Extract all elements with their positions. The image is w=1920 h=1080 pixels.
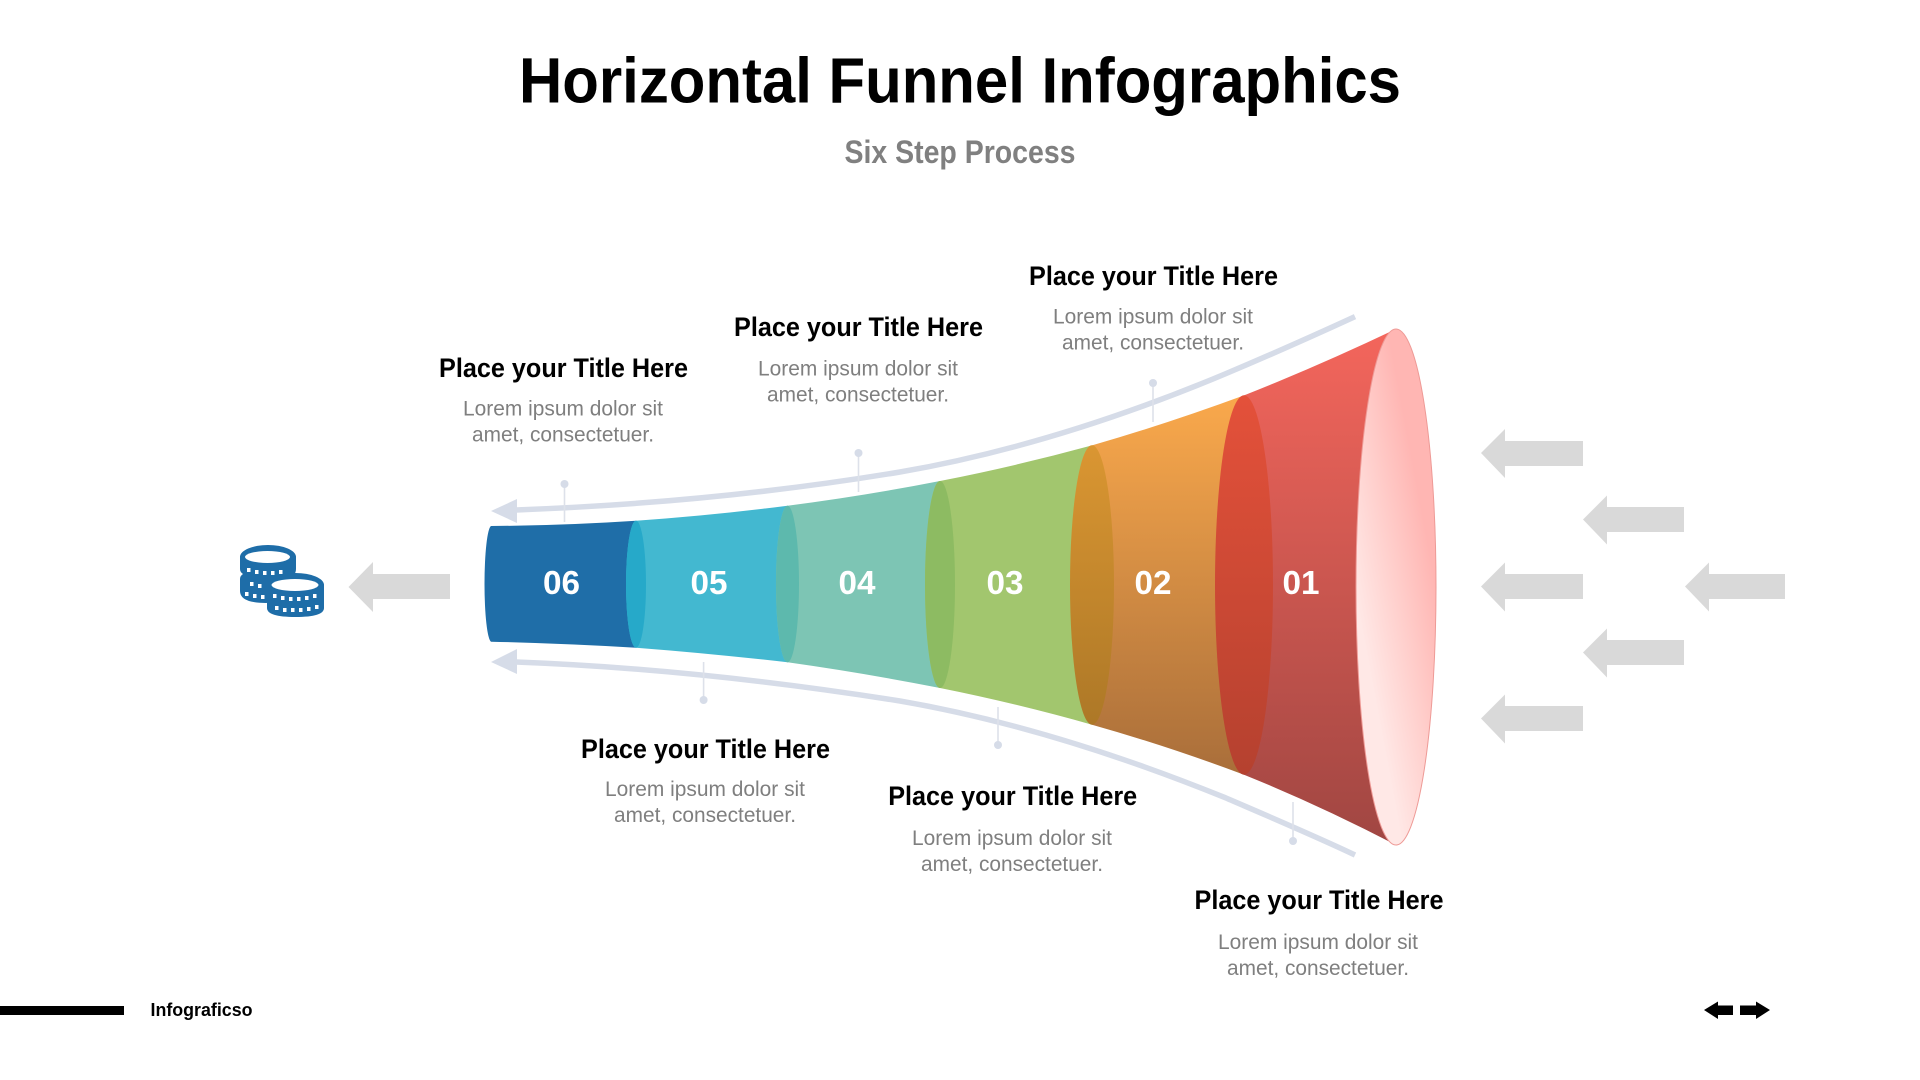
joint 06-05 xyxy=(626,521,646,648)
callout heading: Place your Title Here xyxy=(888,781,1137,811)
callout heading: Place your Title Here xyxy=(1029,261,1278,291)
segment 05 xyxy=(626,506,799,662)
connector 04 xyxy=(854,449,862,492)
callout body xyxy=(1053,306,1253,354)
funnel mouth xyxy=(1356,329,1436,845)
callout: step 02 xyxy=(1029,261,1278,354)
joint 02-01 xyxy=(1215,395,1273,775)
connector 03 xyxy=(994,707,1002,749)
footer arrows xyxy=(1704,1002,1770,1019)
segment 06 xyxy=(485,521,646,648)
footer brand: Infograficso xyxy=(150,1000,252,1020)
joint 05-04 xyxy=(776,506,799,662)
segment 02 xyxy=(1072,395,1271,775)
segment 01 xyxy=(1217,329,1436,845)
callout body xyxy=(1218,931,1418,980)
callout heading: Place your Title Here xyxy=(439,353,688,383)
callout heading: Place your Title Here xyxy=(1194,885,1444,915)
callout body: amet, consectetuer. xyxy=(614,804,796,827)
segment 03 xyxy=(925,445,1112,725)
callout body: Lorem ipsum dolor sit xyxy=(758,358,958,380)
title: Horizontal Funnel Infographics xyxy=(519,44,1401,116)
number 05: 05 xyxy=(690,564,728,601)
callout body: amet, consectetuer. xyxy=(767,384,949,406)
callout body xyxy=(605,778,805,827)
callout body: amet, consectetuer. xyxy=(1062,332,1244,354)
upper guide arrow xyxy=(491,317,1355,523)
number 04: 04 xyxy=(838,564,876,601)
callout body xyxy=(463,398,663,446)
callout: step 06 xyxy=(439,353,688,446)
callout: step 04 xyxy=(734,312,983,406)
callout body: Lorem ipsum dolor sit xyxy=(463,398,663,420)
number 06: 06 xyxy=(543,564,580,601)
callout body xyxy=(758,358,958,406)
subtitle: Six Step Process xyxy=(844,134,1076,170)
arrow group: inputs xyxy=(1481,429,1785,744)
callout heading: Place your Title Here xyxy=(581,734,830,764)
arrow: output to coins xyxy=(348,562,450,612)
callout: step 05 xyxy=(581,734,830,827)
callout body: amet, consectetuer. xyxy=(472,424,654,446)
callout body xyxy=(912,827,1112,876)
callout body: Lorem ipsum dolor sit xyxy=(912,827,1112,850)
number 02: 02 xyxy=(1134,564,1172,601)
funnel xyxy=(485,329,1436,845)
icon: coins xyxy=(240,545,324,617)
callout body: Lorem ipsum dolor sit xyxy=(605,778,805,801)
number 01: 01 xyxy=(1282,564,1320,601)
footer bar xyxy=(0,1006,124,1015)
callout body: Lorem ipsum dolor sit xyxy=(1053,306,1253,328)
callout body: Lorem ipsum dolor sit xyxy=(1218,931,1418,954)
connector 06 xyxy=(560,480,568,522)
connector 02 xyxy=(1149,379,1157,422)
number 03: 03 xyxy=(986,564,1024,601)
callout body: amet, consectetuer. xyxy=(921,853,1103,876)
callout heading: Place your Title Here xyxy=(734,312,983,342)
callout body: amet, consectetuer. xyxy=(1227,957,1409,980)
lower guide arrow xyxy=(491,649,1355,855)
joint 04-03 xyxy=(925,481,955,688)
connector 05 xyxy=(700,662,708,704)
segment 04 xyxy=(776,481,955,688)
connector 01 xyxy=(1289,802,1297,845)
callout: step 01 xyxy=(1194,885,1444,980)
callout: step 03 xyxy=(888,781,1137,876)
joint 03-02 xyxy=(1070,445,1114,725)
